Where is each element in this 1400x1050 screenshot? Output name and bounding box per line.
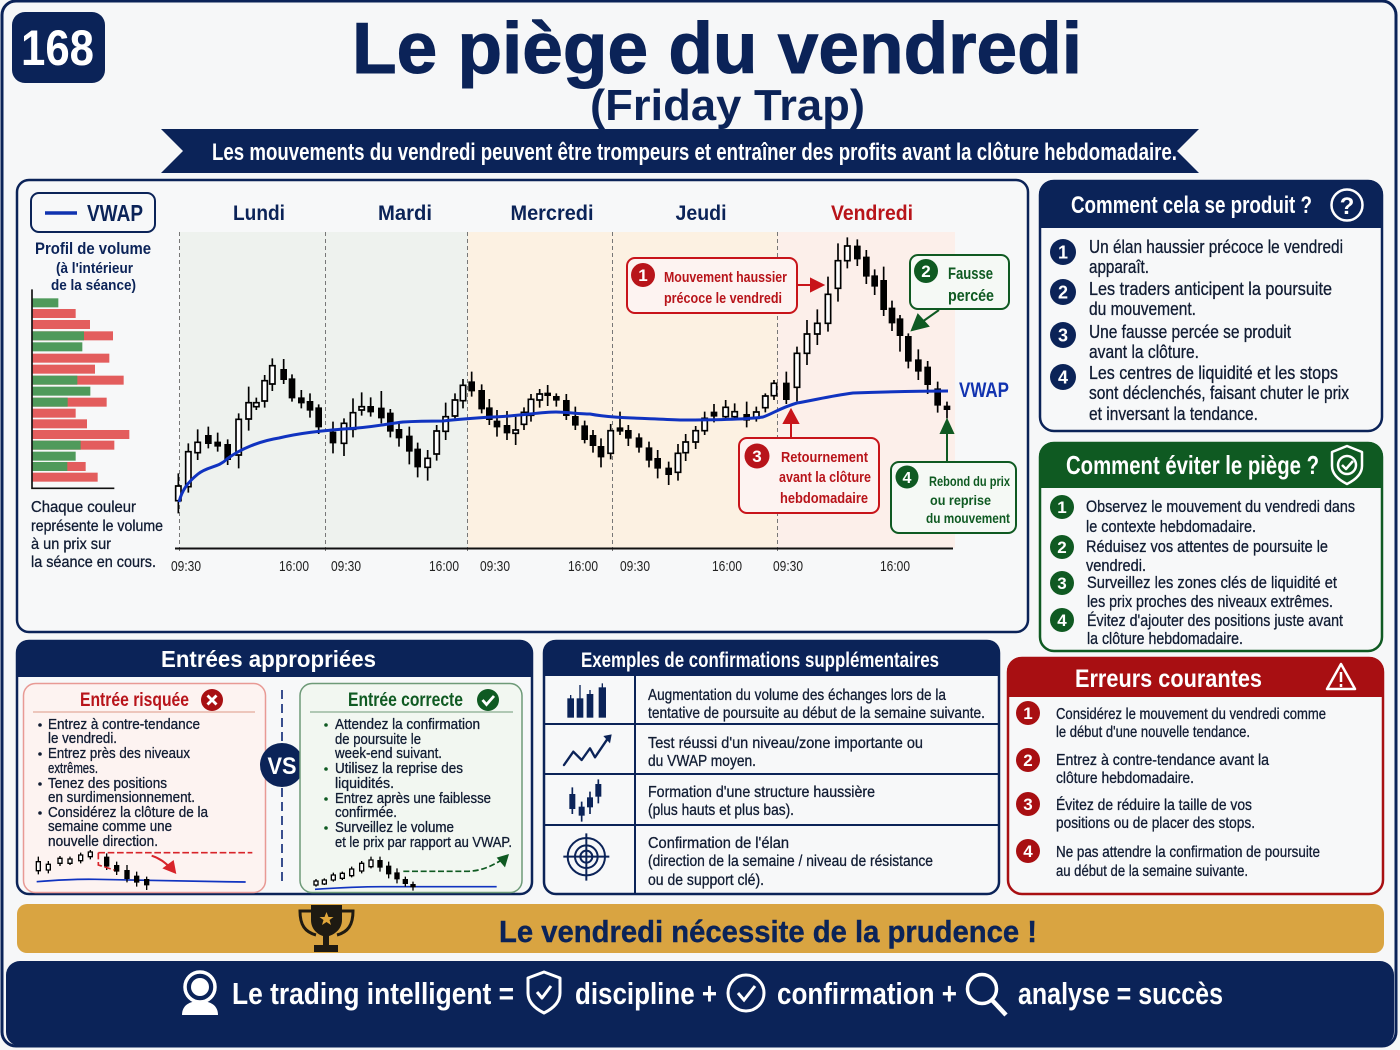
VWAP line <box>179 391 948 502</box>
icon: rising candles <box>569 779 601 822</box>
card: risky entry: en surdimensionnement. <box>48 790 195 806</box>
callout 4: price rebound: Rebond du prix <box>929 473 1010 489</box>
numbered mistakes: clôture hebdomadaire. <box>1056 770 1194 787</box>
numbered steps <box>1050 237 1349 424</box>
footer banner <box>6 961 1394 1046</box>
heading: Erreurs courantes <box>1075 665 1262 693</box>
numbered tips: Observez le mouvement du vendredi dans <box>1086 497 1355 516</box>
volume profile note <box>31 499 163 571</box>
heading: Comment cela se produit ? <box>1071 192 1312 219</box>
volume profile note: à un prix sur <box>31 536 112 553</box>
volume profile bars <box>32 289 129 488</box>
callout 1: early bullish move: Mouvement haussier <box>664 269 787 286</box>
numbered tips: les prix proches des niveaux extrêmes. <box>1087 592 1333 611</box>
heading: Comment éviter le piège ? <box>1066 450 1319 480</box>
numbered steps: et inversant la tendance. <box>1089 404 1258 424</box>
icon: warning triangle <box>1327 664 1355 689</box>
numbered steps: Les centres de liquidité et les stops <box>1089 363 1338 383</box>
badge: number 168: 168 <box>21 20 94 76</box>
time axis labels: 09:30 <box>620 558 650 575</box>
panel: how it happens <box>1039 180 1383 431</box>
panel: weekly chart <box>17 180 1028 632</box>
numbered steps: Les traders anticipent la poursuite <box>1089 279 1332 299</box>
time axis labels: 16:00 <box>880 558 910 575</box>
numbered mistakes <box>1016 701 1326 880</box>
VWAP label: VWAP <box>959 379 1009 402</box>
legend: VWAP <box>31 193 155 232</box>
day labels: Mardi <box>378 202 432 225</box>
callout 4: price rebound: 4 <box>903 470 912 487</box>
card: risky entry: Tenez des positions <box>48 776 167 792</box>
time axis labels: 09:30 <box>480 558 510 575</box>
time axis labels: 09:30 <box>171 558 201 575</box>
numbered tips: 2 <box>1057 538 1067 557</box>
time axis labels <box>171 558 910 575</box>
volume profile heading: (à l'intérieur <box>56 260 133 277</box>
confirmation rows text: du VWAP moyen. <box>648 753 756 770</box>
numbered steps: 4 <box>1058 368 1068 388</box>
callout 3: reversal before weekly close: 3 <box>752 447 762 466</box>
callout 4: price rebound: du mouvement <box>926 510 1010 526</box>
card: correct entry: Surveillez le volume <box>335 820 454 836</box>
time axis labels: 16:00 <box>568 558 598 575</box>
icon: question mark <box>1332 190 1362 220</box>
card: correct entry: de poursuite le <box>335 732 421 748</box>
day labels: Lundi <box>233 202 285 225</box>
formula: trading: Le trading intelligent = <box>232 976 514 1011</box>
card: risky entry: Entrée risquée <box>80 690 189 711</box>
icon: check circle <box>728 975 764 1011</box>
callout 3: reversal before weekly close: avant la clôture <box>779 469 871 486</box>
icon: trophy <box>300 905 353 952</box>
gold banner <box>17 904 1384 953</box>
callout 2: false breakout: Fausse <box>948 264 993 283</box>
numbered steps: Un élan haussier précoce le vendredi <box>1089 237 1343 257</box>
subtitle: (Friday Trap) <box>590 81 865 130</box>
card: correct entry: week-end suivant. <box>334 746 442 762</box>
divider: VS <box>260 690 304 882</box>
card: correct entry: Utilisez la reprise des <box>335 761 463 777</box>
callout 1: early bullish move <box>627 258 797 313</box>
time axis labels: 16:00 <box>429 558 459 575</box>
day background bands <box>175 232 955 552</box>
callout 2: false breakout: 2 <box>921 262 931 281</box>
time axis labels: 09:30 <box>331 558 361 575</box>
callout 3: reversal before weekly close: Retournement <box>781 449 868 466</box>
volume profile note: Chaque couleur <box>31 499 137 516</box>
numbered tips: 3 <box>1057 574 1067 593</box>
heading: Entrées appropriées <box>161 646 376 672</box>
arrow: callout 4 up to last candle <box>941 420 953 462</box>
card: correct entry: Entrée correcte <box>348 690 463 711</box>
card: correct entry: et le prix par rapport au VWAP. <box>335 835 512 851</box>
card: risky entry <box>24 684 266 892</box>
numbered steps: 1 <box>1058 242 1068 262</box>
confirmation rows text: tentative de poursuite au début de la semaine suivante. <box>648 705 985 722</box>
confirmation rows text: ou de support clé). <box>648 872 764 889</box>
confirmation rows text: Confirmation de l'élan <box>648 835 789 852</box>
callout 4: price rebound: ou reprise <box>930 492 991 508</box>
panel: appropriate entries <box>16 640 532 894</box>
numbered mistakes: 4 <box>1023 842 1033 861</box>
mini chart: correct entry <box>314 854 509 891</box>
card: correct entry: Attendez la confirmation <box>335 717 480 733</box>
numbered steps: avant la clôture. <box>1089 342 1199 362</box>
callout 2: false breakout <box>910 255 1009 309</box>
numbered mistakes: Évitez de réduire la taille de vos <box>1056 795 1252 814</box>
card: correct entry: Entrez après une faiblesse <box>335 791 491 807</box>
icon: shield check <box>1332 446 1362 484</box>
numbered steps: 3 <box>1058 326 1068 346</box>
numbered steps: Une fausse percée se produit <box>1089 322 1291 342</box>
numbered tips: Réduisez vos attentes de poursuite le <box>1086 537 1328 556</box>
card: risky entry: le vendredi. <box>48 731 117 747</box>
volume profile note: la séance en cours. <box>31 554 156 571</box>
time axis labels: 16:00 <box>279 558 309 575</box>
numbered tips <box>1050 495 1355 648</box>
banner ribbon <box>161 129 1199 173</box>
numbered steps: apparaît. <box>1089 257 1149 277</box>
arrow: callout 3 up to VWAP <box>784 410 798 438</box>
icon: question mark: ? <box>1340 193 1354 220</box>
callout 4: price rebound <box>891 462 1016 533</box>
card: risky entry: Entrez à contre-tendance <box>48 717 200 733</box>
legend: VWAP: VWAP <box>87 200 143 226</box>
icon: volume bars <box>567 683 606 718</box>
numbered steps: du mouvement. <box>1089 299 1196 319</box>
icon: magnifier <box>968 974 1006 1015</box>
numbered mistakes: Considérez le mouvement du vendredi comme <box>1056 706 1326 723</box>
formula: discipline: discipline + <box>575 976 717 1011</box>
numbered mistakes: positions ou de placer des stops. <box>1056 815 1255 832</box>
confirmation rows text: (plus hauts et plus bas). <box>648 802 794 819</box>
volume profile heading: Profil de volume <box>35 239 151 258</box>
candlesticks: monday to thursday <box>176 358 588 513</box>
card: correct entry: liquidités. <box>335 776 394 792</box>
volume profile heading <box>35 239 151 294</box>
heading: Exemples de confirmations supplémentaires <box>581 649 939 672</box>
day labels: Vendredi <box>831 202 913 225</box>
numbered tips: vendredi. <box>1086 556 1146 575</box>
panel: additional confirmations <box>543 640 1000 894</box>
card: risky entry: Entrez près des niveaux <box>48 746 191 762</box>
numbered mistakes: Ne pas attendre la confirmation de poursuite <box>1056 844 1320 861</box>
numbered mistakes: 2 <box>1023 751 1033 770</box>
formula: confirmation: confirmation + <box>777 976 957 1011</box>
numbered tips: la clôture hebdomadaire. <box>1087 629 1243 648</box>
day labels: Mercredi <box>510 202 594 225</box>
numbered mistakes: Entrez à contre-tendance avant la <box>1056 752 1269 769</box>
panel: common mistakes <box>1007 657 1384 894</box>
divider: VS: VS <box>268 753 296 780</box>
formula: analysis: analyse = succès <box>1018 976 1223 1011</box>
numbered mistakes: au début de la semaine suivante. <box>1056 863 1248 880</box>
numbered steps: sont déclenchés, faisant chuter le prix <box>1089 383 1349 403</box>
volume profile heading: de la séance) <box>51 277 136 294</box>
candlesticks: thursday and friday <box>590 237 950 485</box>
confirmation rows text: Formation d'une structure haussière <box>648 784 875 801</box>
card: risky entry: nouvelle direction. <box>48 834 158 850</box>
numbered mistakes: 1 <box>1023 704 1033 723</box>
confirmation rows text: Test réussi d'un niveau/zone importante ou <box>648 735 923 752</box>
day labels: Jeudi <box>676 202 726 225</box>
icon: rising zigzag arrow <box>564 734 612 765</box>
panel: how to avoid the trap <box>1039 442 1383 651</box>
numbered tips: Surveillez les zones clés de liquidité et <box>1087 573 1337 592</box>
card: risky entry: Considérez la clôture de la <box>48 805 209 821</box>
title: Le piège du vendredi <box>352 9 1082 89</box>
callout 1: early bullish move: 1 <box>638 266 648 285</box>
icon: trader <box>182 972 218 1015</box>
numbered mistakes: le début d'une nouvelle tendance. <box>1056 724 1250 741</box>
time axis labels: 16:00 <box>712 558 742 575</box>
card: risky entry: extrêmes. <box>48 761 98 777</box>
volume profile note: représente le volume <box>31 518 163 535</box>
numbered tips: 4 <box>1057 611 1067 630</box>
numbered mistakes: 3 <box>1023 795 1033 814</box>
callout 2: false breakout: percée <box>948 286 994 305</box>
card: correct entry: confirmée. <box>335 805 397 821</box>
icon: target <box>563 833 609 881</box>
numbered steps: 2 <box>1058 282 1068 302</box>
callout 3: reversal before weekly close: hebdomadaire <box>780 490 868 507</box>
callout 1: early bullish move: précoce le vendredi <box>664 290 782 307</box>
numbered tips: 1 <box>1057 498 1067 517</box>
card: correct entry <box>300 684 522 892</box>
callout 3: reversal before weekly close <box>739 438 879 513</box>
day labels <box>233 202 913 225</box>
numbered tips: Évitez d'ajouter des positions juste avant <box>1087 611 1343 630</box>
time axis labels: 09:30 <box>773 558 803 575</box>
mini chart: risky entry <box>36 850 252 890</box>
arrow: callout 2 to candle <box>912 310 939 330</box>
icon: shield <box>528 972 560 1013</box>
confirmation rows text: Augmentation du volume des échanges lors de la <box>648 687 946 704</box>
gold banner text: Le vendredi nécessite de la prudence ! <box>499 914 1037 949</box>
arrow: callout 1 to candle <box>797 279 823 291</box>
confirmation rows text <box>648 687 985 889</box>
card: risky entry: semaine comme une <box>48 819 172 835</box>
numbered tips: le contexte hebdomadaire. <box>1086 517 1256 536</box>
confirmation rows text: (direction de la semaine / niveau de résistance <box>648 853 933 870</box>
